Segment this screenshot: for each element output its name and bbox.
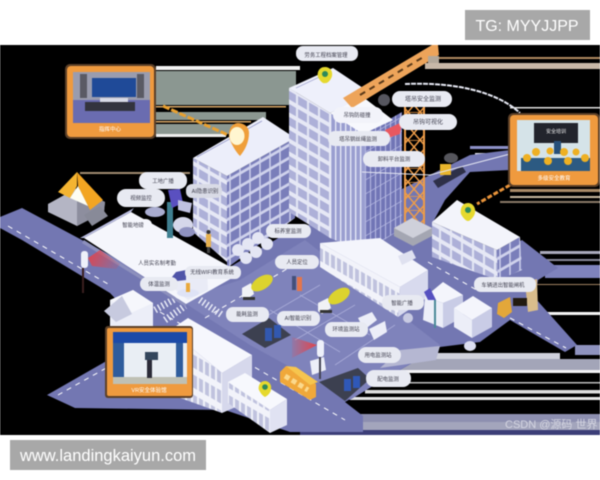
label: environment: 环境监测站 [333, 325, 360, 333]
excavator [433, 153, 466, 188]
label: WiFi education [185, 266, 241, 279]
panel caption: 指挥中心 [99, 125, 121, 133]
label: real-name attendance: 人员实名制考勤 [138, 259, 176, 267]
cement mixer truck right [318, 284, 353, 314]
photo: classroom: 安全培训 [546, 128, 566, 135]
connector: command centre to pin [163, 106, 228, 135]
label: environment [325, 322, 368, 337]
label: curing room [266, 224, 311, 238]
label: real-name attendance [132, 256, 182, 270]
icon: yellow pin right [461, 203, 475, 221]
label: distribution [366, 370, 411, 387]
label: energy [226, 307, 269, 322]
broadcast mast and equipment [145, 189, 195, 238]
photo: VR booth [113, 332, 187, 384]
background compression streaks [80, 57, 600, 435]
tower crane [343, 45, 439, 246]
label: personnel location [275, 255, 319, 269]
label: AI recognition [277, 311, 320, 326]
label: AI hazard [186, 184, 222, 198]
label: smart broadcast [382, 295, 424, 310]
building: tall glass tower [289, 68, 402, 253]
worker figure [206, 230, 211, 253]
panel caption: VR安全体验馆 [131, 386, 167, 394]
panel: safety education [508, 113, 600, 187]
panel caption: 多级安全教育 [537, 174, 571, 182]
school bus [280, 366, 318, 400]
photo: control room [73, 72, 150, 123]
label: labour archive: 劳务工程档案管理 [304, 51, 348, 59]
label: weighbridge: 智能地磅 [122, 221, 144, 229]
parked vans [310, 312, 387, 375]
label: unloading platform: 卸料平台监测 [378, 155, 410, 163]
label: vehicle gate: 车辆进出智能闸机 [481, 281, 525, 289]
label: hook visualisation: 吊钩可视化 [413, 118, 443, 126]
label: labour archive [296, 46, 358, 61]
badge: telegram id: TG: MYYJJPP [475, 18, 579, 35]
ground plate and roads [0, 150, 577, 432]
icon: yellow pin bottom [259, 381, 271, 397]
label: energy: 能耗监测 [236, 310, 258, 318]
label: vehicle gate [474, 277, 536, 292]
label: personnel location: 人员定位 [286, 258, 308, 266]
label: power monitoring: 用电监测站 [365, 351, 392, 359]
vehicle gate [497, 279, 538, 318]
label: power monitoring [358, 347, 401, 363]
small buildings [403, 282, 492, 351]
building: tower 1 (left) [193, 117, 295, 268]
label: wire rope: 塔吊钢丝绳监测 [339, 135, 377, 143]
panel: VR safety experience [105, 326, 193, 398]
building: long low block [320, 238, 428, 317]
connector: education panel to pin [477, 185, 510, 204]
label: hook visualisation [399, 114, 457, 130]
label: AI hazard: AI隐患识别 [192, 187, 218, 195]
pyramid monument [48, 172, 108, 226]
label: curing room: 标养室监测 [275, 227, 301, 235]
label: unloading platform [363, 151, 425, 167]
label: crane safety [392, 91, 452, 107]
badge: website [10, 440, 206, 470]
badge: website: www.landingkaiyun.com [19, 447, 196, 465]
blue containers right [319, 368, 370, 401]
storefront building [104, 290, 153, 340]
connector: crane to education panel [405, 84, 520, 113]
badge: telegram id [465, 10, 590, 40]
label: site broadcast [139, 172, 187, 189]
cement mixer truck left [242, 271, 276, 300]
label: weighbridge [114, 219, 152, 231]
icon: orange map pin [229, 123, 249, 156]
label: WiFi education: 无线WIFI教育系统 [190, 268, 234, 276]
label: hook anti-collision [333, 107, 383, 123]
gate sensor left [81, 250, 120, 293]
label: site broadcast: 工地广播 [152, 177, 174, 185]
label: video: 视频监控 [130, 194, 152, 202]
workers group [292, 276, 302, 291]
label: hook anti-collision: 吊钩防碰撞 [344, 111, 371, 119]
label: video [117, 189, 165, 207]
watermark: CSDN: CSDN @源码 世界 [505, 417, 597, 431]
building: lower warehouse [170, 318, 252, 413]
label: smart broadcast: 智能广播 [391, 299, 413, 307]
label: AI recognition: AI智能识别 [285, 314, 311, 322]
label: distribution: 配电监测 [377, 375, 399, 383]
building: small striped block [228, 373, 287, 433]
label: temperature [140, 277, 178, 291]
building: right block [432, 200, 522, 280]
label: crane safety: 塔吊安全监测 [405, 95, 441, 103]
label: wire rope [328, 131, 390, 146]
smart weighbridge platform [80, 208, 241, 307]
label: temperature: 体温监测 [148, 280, 170, 288]
panel: command centre [65, 64, 156, 139]
connector: site lines to education panel [362, 154, 510, 175]
icon: yellow pin top [318, 67, 332, 83]
stacked materials [232, 232, 273, 264]
blue containers left [242, 318, 291, 348]
gate sensor right [292, 337, 324, 379]
